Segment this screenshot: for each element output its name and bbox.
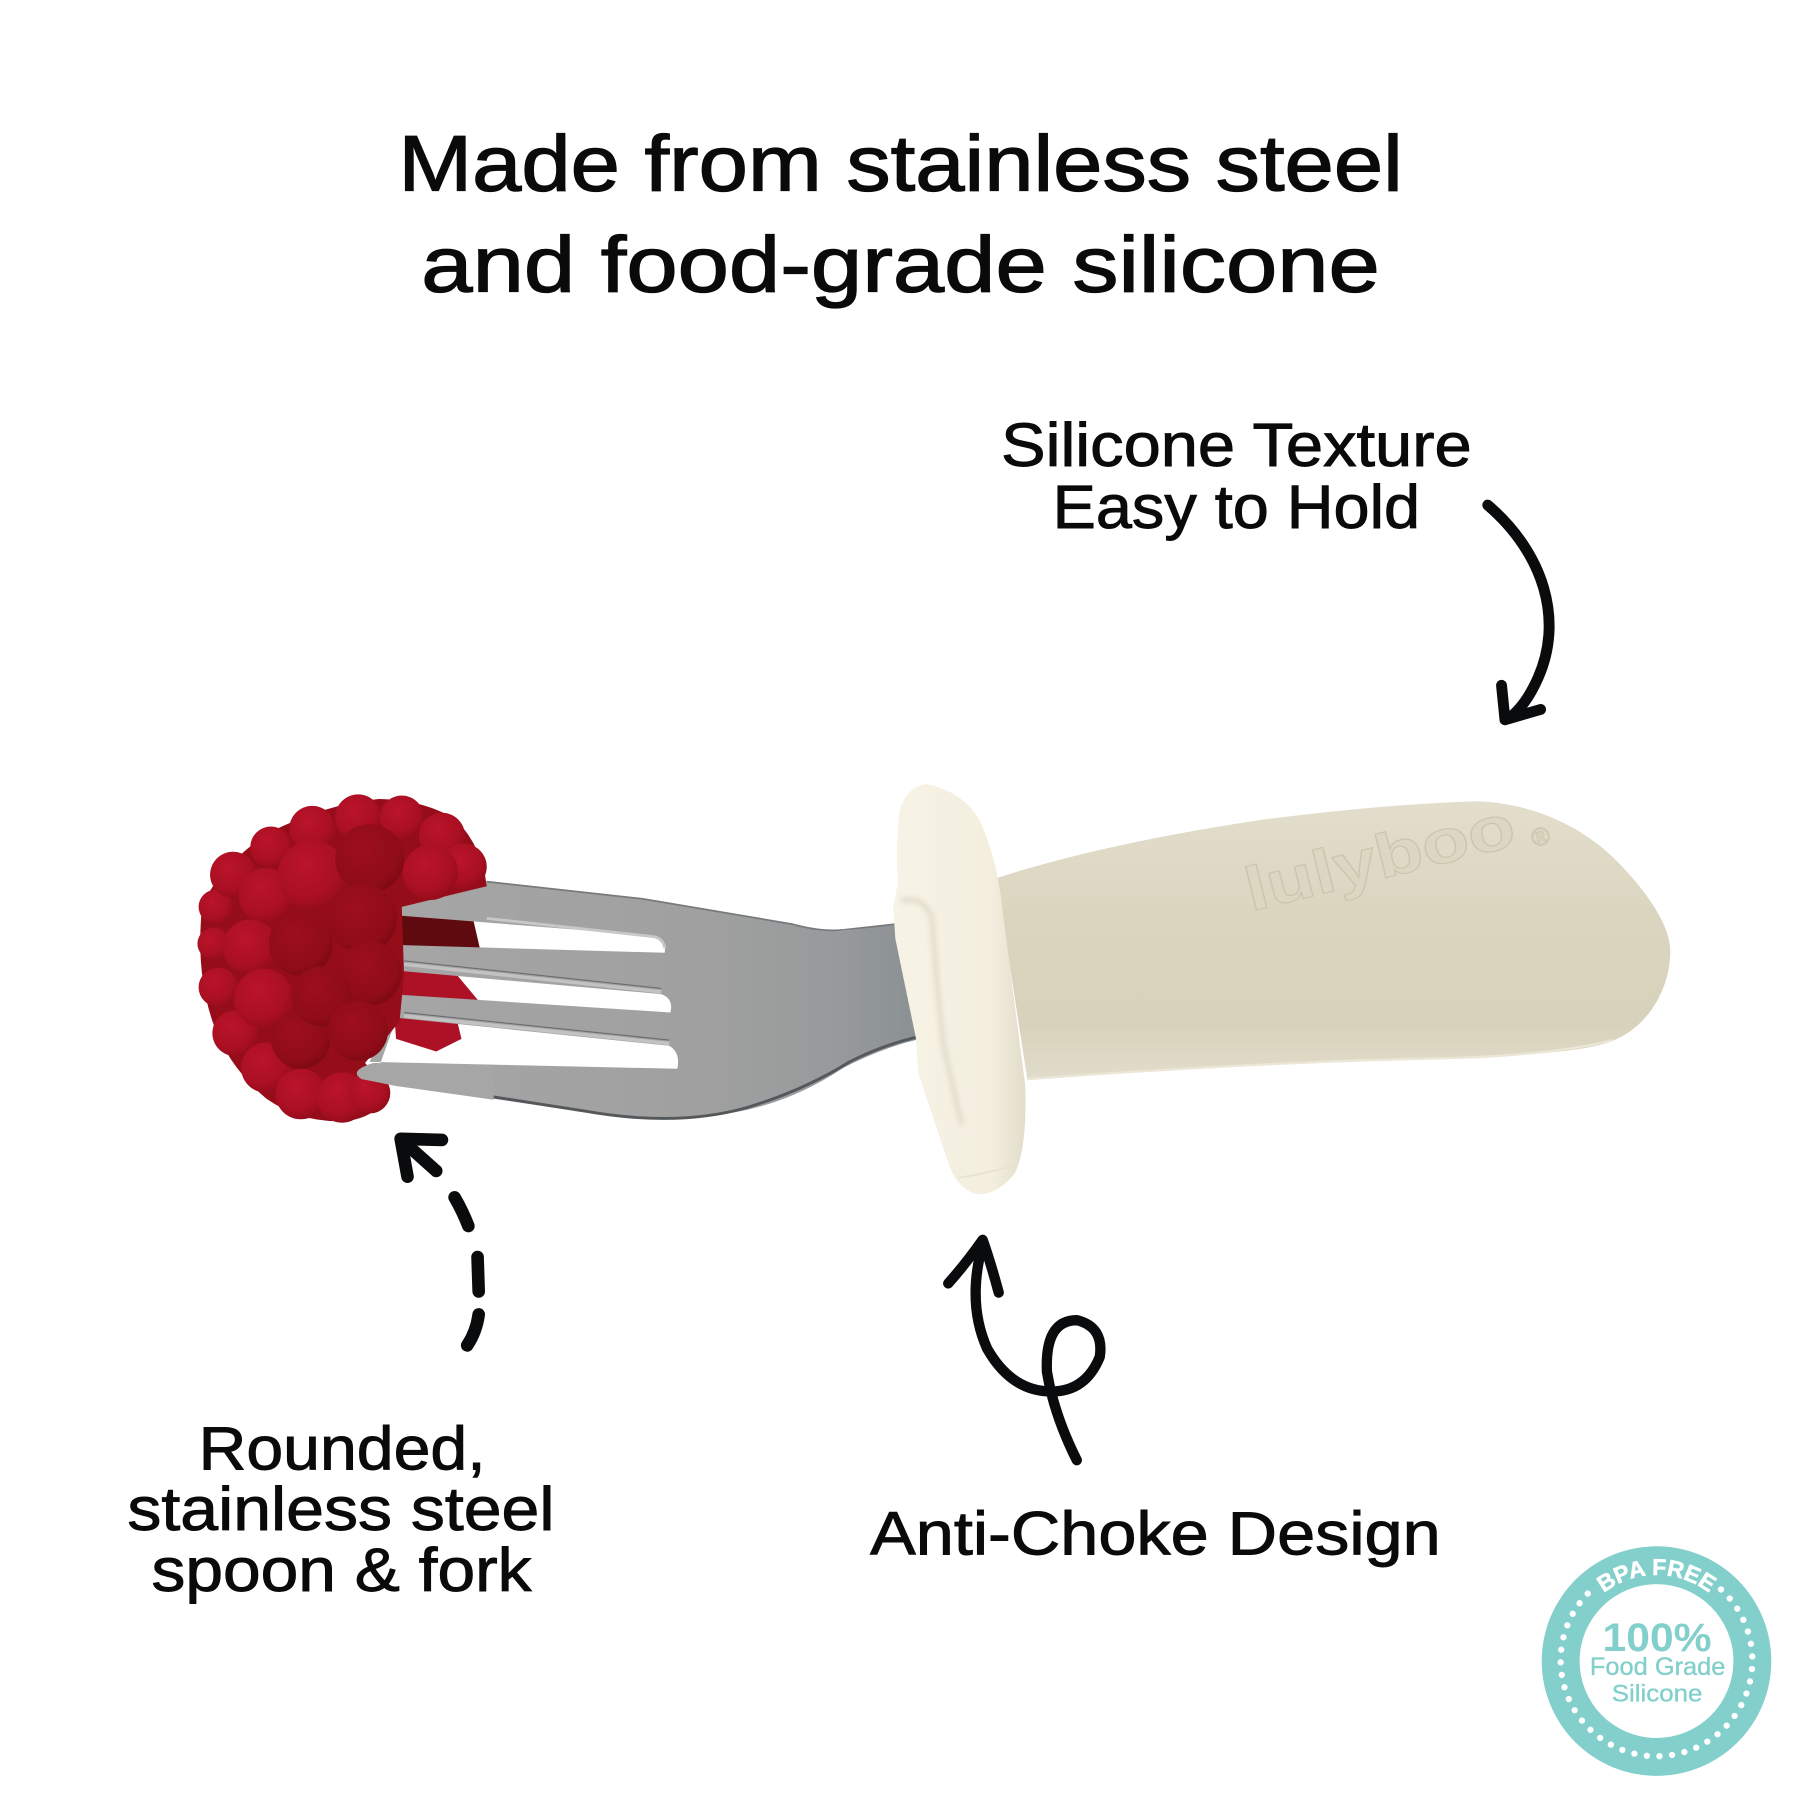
title: Made from stainless steel — [398, 119, 1403, 208]
fork tip over raspberry — [357, 1063, 494, 1100]
badge: BPA free: Silicone — [1612, 1680, 1702, 1707]
embossed logo: ® — [1528, 821, 1554, 853]
arrow: loop to shield — [948, 1240, 1100, 1460]
label: rounded spoon and fork: Rounded, — [199, 1414, 486, 1482]
arrow: dashed to fork tip — [401, 1139, 479, 1345]
embossed logo: lulyboo — [1238, 791, 1522, 925]
embossed logo — [1238, 791, 1554, 925]
raspberry front — [197, 794, 487, 1123]
label: rounded spoon and fork: spoon & fork — [152, 1536, 532, 1604]
badge: BPA free: 100% — [1603, 1615, 1712, 1660]
badge: BPA free: BPA FREE — [1596, 1558, 1718, 1593]
label: silicone texture — [1001, 411, 1472, 541]
arrow: to handle — [1488, 505, 1549, 720]
badge: BPA free: Food Grade — [1590, 1653, 1725, 1681]
label: silicone texture: Silicone Texture — [1001, 411, 1472, 479]
label: rounded spoon and fork — [127, 1414, 554, 1604]
fork — [365, 882, 921, 1118]
label: anti-choke design: Anti-Choke Design — [870, 1499, 1441, 1567]
handle — [996, 791, 1670, 1080]
raspberry back — [390, 882, 505, 1052]
label: silicone texture: Easy to Hold — [1053, 473, 1420, 541]
title — [398, 119, 1403, 309]
badge: BPA free — [1542, 1546, 1772, 1776]
title: and food-grade silicone — [421, 220, 1380, 309]
product photo: fork with raspberry — [197, 784, 1670, 1194]
anti-choke shield — [893, 784, 1025, 1194]
label: rounded spoon and fork: stainless steel — [127, 1475, 554, 1543]
